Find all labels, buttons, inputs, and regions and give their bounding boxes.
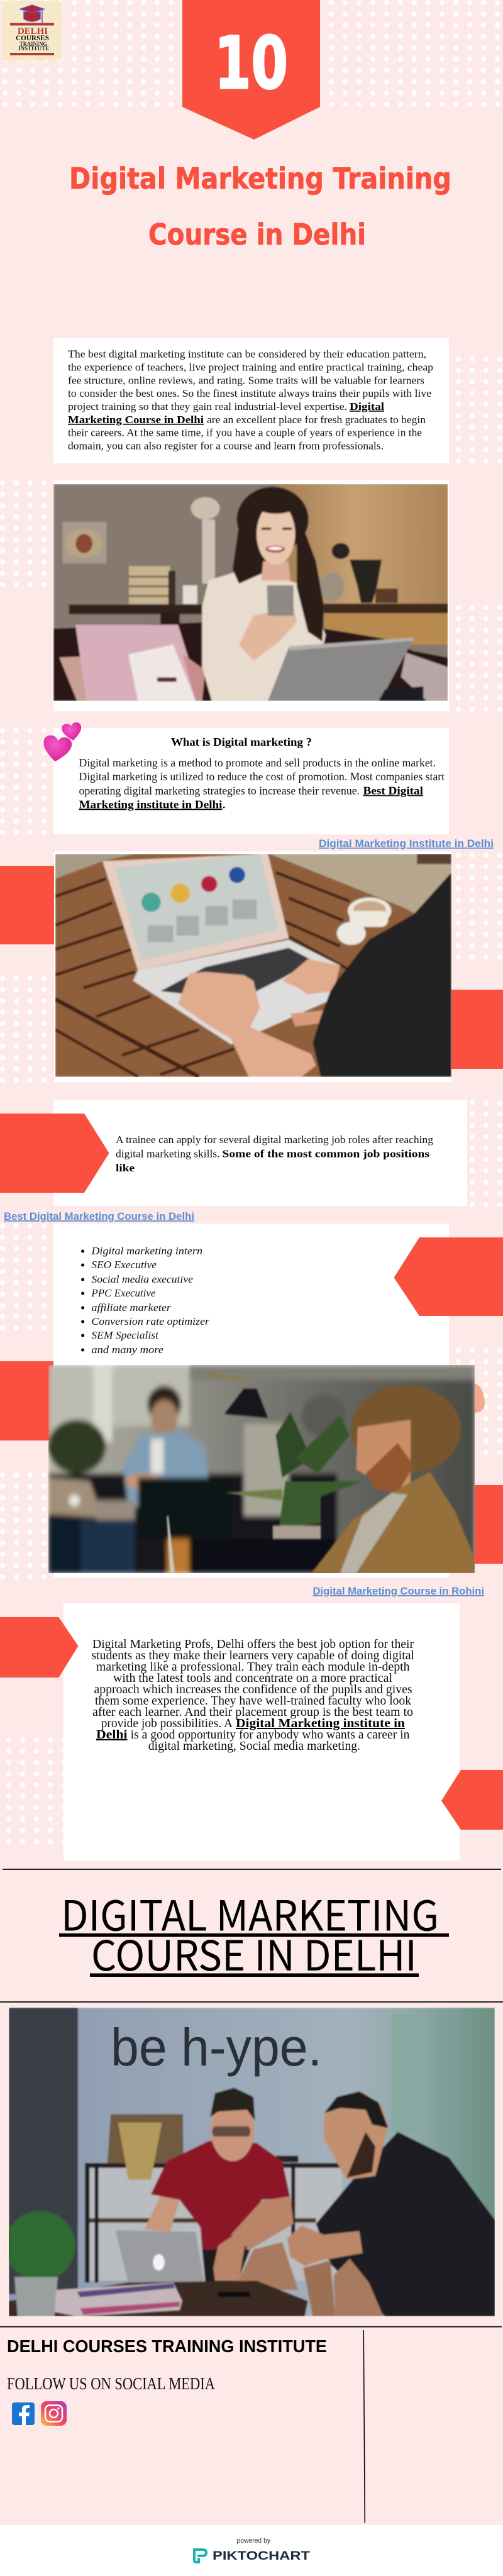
intro paragraph: fee structure, online reviews, and rating. Some traits will be valuable for learners [68, 374, 424, 386]
logo: Delhi Courses Training Institute: INSTITUTE [18, 45, 49, 52]
centered paragraph: students as they make their learners very capable of doing digital [91, 1649, 414, 1662]
panel: introduction text [53, 338, 449, 463]
title: Digital Marketing Training [69, 162, 451, 196]
panel: photo of two men at laptop [5, 2008, 495, 2316]
panel: photo of woman with phone and laptop [53, 480, 449, 711]
paragraph: operating digital marketing strategies to increase their revenue. [79, 785, 360, 797]
divider line [0, 2001, 503, 2003]
centered paragraph: Digital Marketing institute in [236, 1716, 405, 1730]
number 10: 10 [214, 21, 288, 105]
paragraph [116, 1134, 433, 1174]
intro paragraph: The best digital marketing institute can be considered by their education pattern, [68, 348, 426, 360]
intro paragraph: Marketing Course in Delhi [68, 414, 204, 426]
logo: Delhi Courses Training Institute: TRAINING [19, 41, 47, 47]
title: Course in Delhi [148, 218, 366, 252]
salmon shape behind photo [475, 1383, 485, 1413]
paragraph: digital marketing skills. [116, 1148, 220, 1159]
centered paragraph: after each learner. And their placement group is the best team to [92, 1705, 413, 1719]
paragraph: . [223, 799, 225, 811]
centered paragraph: approach which increases the confidence of the pupils and gives [94, 1683, 412, 1696]
centered paragraph: digital marketing, Social media marketing. [148, 1739, 360, 1753]
wall text in photo: be h-ype. [111, 2018, 322, 2077]
footer: powered by Piktochart: powered by [236, 2537, 270, 2545]
centered paragraph: Delhi [96, 1728, 128, 1742]
footer: follow us: FOLLOW US ON SOCIAL MEDIA [7, 2374, 215, 2393]
link: Digital Marketing Institute in Delhi: Digital Marketing Institute in Delhi [319, 837, 494, 849]
logo: Delhi Courses Training Institute: COURSES [16, 33, 49, 42]
panel: job roles intro [53, 1100, 467, 1206]
red arrow pointing left [394, 1237, 503, 1316]
logo: Delhi Courses Training Institute: DELHI [18, 26, 48, 36]
footer: institute name: DELHI COURSES TRAINING INSTITUTE [7, 2336, 327, 2356]
bullet list: PPC Executive [91, 1287, 156, 1299]
centered paragraph: provide job possibilities. A [101, 1716, 233, 1730]
banner with number 10 [182, 0, 320, 140]
heading: Digital Marketing Course in Delhi: COURSE IN DELHI [91, 1923, 417, 1983]
paragraph [79, 756, 445, 811]
intro paragraph: their careers. At the same time, if you have a couple of years of experience in the [68, 427, 422, 439]
red block right of laptop photo [451, 990, 503, 1069]
paragraph: Best Digital [363, 785, 423, 797]
bullet list [81, 1245, 209, 1356]
panel: photo of two men working [48, 1364, 475, 1574]
paragraph: Digital marketing is utilized to reduce the cost of promotion. Most companies start [79, 770, 445, 783]
bullet list: SEO Executive [91, 1259, 157, 1271]
divider line [0, 2326, 502, 2328]
red block right of men photo [475, 1485, 503, 1564]
intro paragraph: the experience of teachers, live project training and entire practical training, cheap [68, 361, 433, 373]
intro paragraph: to consider the best ones. So the finest institute always trains their pupils with live [68, 387, 431, 399]
red arrow pointing right [0, 1617, 78, 1678]
intro paragraph: project training so that they gain real industrial-level expertise. [68, 401, 347, 412]
bullet list: Digital marketing intern [91, 1245, 202, 1257]
centered paragraph: Digital Marketing Profs, Delhi offers the best job option for their [92, 1637, 414, 1651]
footer: powered by Piktochart [0, 2525, 503, 2576]
divider line [3, 1869, 501, 1870]
paragraph: A trainee can apply for several digital marketing job roles after reaching [116, 1134, 433, 1146]
centered paragraph: is a good opportunity for anybody who wants a career in [131, 1728, 410, 1742]
intro paragraph [68, 348, 433, 452]
panel: job position list [53, 1224, 449, 1578]
paragraph: Some of the most common job positions [223, 1148, 430, 1159]
heading: Digital Marketing Course in Delhi: DIGITAL MARKETING [61, 1882, 439, 1943]
icon: instagram [41, 2401, 67, 2426]
panel: photo of laptop on wooden table [54, 851, 451, 1082]
panel: what is digital marketing [53, 728, 449, 834]
footer: powered by Piktochart: PIKTOCHART [213, 2550, 310, 2563]
bullet list: SEM Specialist [91, 1329, 159, 1341]
bullet list: affiliate marketer [91, 1302, 171, 1313]
paragraph: Marketing institute in Delhi [79, 799, 223, 811]
centered paragraph [91, 1637, 414, 1753]
icon: Piktochart logo [194, 2550, 206, 2562]
icon: graduation cap [20, 5, 44, 23]
link: Digital Marketing Course in Rohini: Digital Marketing Course in Rohini [313, 1585, 484, 1597]
heading: What is Digital marketing ? [171, 736, 312, 748]
red arrow pointing left [441, 1770, 503, 1830]
centered paragraph: them some experience. They have well-trained faculty who look [95, 1694, 411, 1708]
title [69, 162, 451, 252]
centered paragraph: with the latest tools and concentrate on a more practical [113, 1671, 392, 1685]
paragraph: Digital marketing is a method to promote and sell products in the online market. [79, 756, 436, 769]
link: Best Digital Marketing Course in Delhi: Best Digital Marketing Course in Delhi [4, 1210, 194, 1222]
centered paragraph: marketing like a professional. They train each module in-depth [96, 1660, 410, 1674]
paragraph: like [116, 1162, 135, 1174]
icon: hearts [41, 722, 83, 763]
icon: facebook [12, 2402, 35, 2425]
bullet list: Social media executive [91, 1273, 193, 1285]
intro paragraph: domain, you can also register for a course and learn from professionals. [68, 440, 384, 452]
panel: digital marketing profs [64, 1603, 460, 1860]
footer vertical divider [363, 2330, 365, 2523]
bullet list: Conversion rate optimizer [91, 1315, 209, 1327]
bullet list: and many more [91, 1344, 163, 1356]
heading: Digital Marketing Course in Delhi [59, 1882, 449, 1983]
red block left of laptop photo [0, 866, 55, 944]
red arrow pointing right [0, 1114, 109, 1193]
dot patterns [0, 0, 503, 1847]
intro paragraph: are an excellent place for fresh graduates to begin [207, 414, 426, 426]
intro paragraph: Digital [350, 401, 384, 412]
red block left of men photo [0, 1361, 53, 1440]
logo: Delhi Courses Training Institute [3, 1, 62, 60]
